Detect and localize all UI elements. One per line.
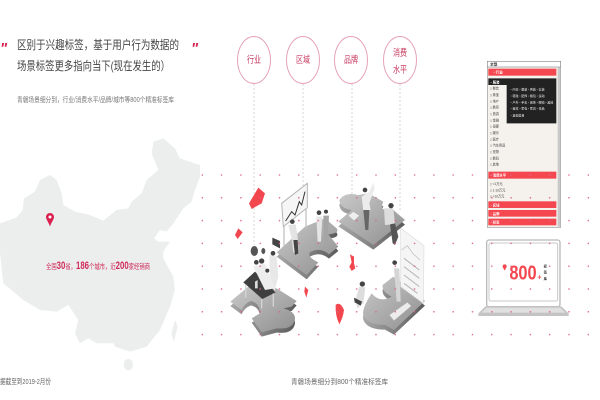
panel dark flyout menu: ▫ 其他类目 bbox=[511, 112, 525, 117]
panel search box: 全部 bbox=[490, 62, 498, 67]
panel dark flyout menu: ▫ 服装 bbox=[491, 79, 500, 84]
panel category list: ▯ 其他 bbox=[490, 162, 500, 167]
panel red header: tags bbox=[488, 219, 556, 225]
people at the table bbox=[269, 255, 278, 292]
category circle: 消费水平 bbox=[384, 36, 416, 84]
panel category list: ▯ 医疗 bbox=[490, 136, 500, 141]
subheading: 青磐场景细分到，行业/消费水平/品牌/城市等800个精准标签库 bbox=[17, 95, 174, 104]
panel dark flyout menu: ▫ 美妆 ▫ 家电 ▫ 家具 ▫ 食品 bbox=[511, 106, 545, 111]
vertical label: 标 bbox=[544, 263, 548, 268]
puzzle piece: bottom right bbox=[354, 228, 425, 335]
opening quote mark: " bbox=[0, 40, 8, 57]
panel category list: ▯ 餐饮 bbox=[490, 86, 500, 91]
panel red header: consumption level: ▫ 消费水平 bbox=[491, 173, 507, 178]
map of China bbox=[0, 138, 200, 370]
panel red header: consumption level bbox=[488, 172, 556, 179]
panel category list: ▯ 旅游 bbox=[490, 111, 500, 116]
panel consumption options: ▯ <1万元 bbox=[490, 182, 503, 186]
footnote: data date: 据截至到2019-2月份 bbox=[0, 376, 51, 386]
map pin icon bbox=[46, 213, 54, 226]
bench bbox=[389, 302, 411, 321]
filter panel mock-up bbox=[487, 61, 561, 227]
panel consumption options: ▯ 1-10万元 bbox=[490, 188, 506, 192]
panel category list bbox=[490, 86, 505, 167]
vertical label: 库 bbox=[544, 276, 548, 281]
panel red header: region bbox=[488, 201, 556, 208]
category circle: 品牌: 品牌 bbox=[344, 54, 358, 66]
two standing people bbox=[316, 217, 322, 242]
panel red header: industry bbox=[488, 69, 556, 76]
panel category list: ▯ 母婴 bbox=[490, 124, 499, 129]
panel red header: brand bbox=[488, 210, 556, 217]
panel dark flyout menu: ▫ 鞋靴 ▫ 配饰 ▫ 箱包 ▫ 运动 bbox=[511, 93, 545, 98]
vertical label bbox=[544, 263, 548, 281]
panel category list: ▯ 地产 bbox=[490, 98, 499, 103]
category circle: 消费水平: 水平 bbox=[393, 64, 407, 76]
panel category list: ▯ 教育 bbox=[490, 105, 499, 110]
panel scrollbar bbox=[558, 67, 560, 227]
tablet on piece bbox=[348, 212, 359, 221]
table with laptop bbox=[243, 272, 276, 299]
panel search box bbox=[487, 61, 561, 67]
dashed connector lines bbox=[254, 84, 400, 245]
puzzle illustration: left half bbox=[230, 183, 338, 337]
vertical label: 签 bbox=[544, 270, 548, 275]
category circle: 品牌 bbox=[334, 36, 368, 84]
panel dark flyout menu: ▫ 户外 ▫ 手表 ▫ 首饰 ▫ 眼镜 ▫ 其他 bbox=[511, 99, 553, 104]
category circle: 行业 bbox=[238, 36, 270, 84]
laptop with 800+ labels bbox=[478, 240, 569, 316]
category circle: 行业: 行业 bbox=[247, 54, 261, 66]
report sheet bbox=[401, 228, 424, 303]
small sign bbox=[272, 238, 280, 248]
laptop body bbox=[478, 240, 569, 316]
panel consumption options: ▯ >10万元 bbox=[490, 195, 505, 199]
map statistics text: 全国30省，186个城市，近200家经销商 bbox=[46, 260, 150, 272]
plus sign: + bbox=[537, 273, 542, 282]
closing quote mark: " bbox=[191, 40, 199, 57]
seated person bbox=[355, 287, 365, 308]
panel category list: ▯ 宠物 bbox=[490, 149, 499, 154]
category circle: 消费水平: 消费 bbox=[393, 47, 407, 59]
panel red header: region: ▫ 区域 bbox=[491, 202, 500, 207]
panel red header: brand: ▫ 品牌 bbox=[491, 211, 500, 216]
panel category list: ▯ 金融 bbox=[490, 117, 500, 122]
panel dark flyout menu bbox=[488, 78, 556, 123]
puzzle illustration: right half bbox=[336, 182, 425, 335]
puzzle piece: top right bbox=[338, 182, 405, 250]
headline bbox=[17, 37, 179, 73]
red floating shapes bbox=[235, 188, 308, 298]
panel consumption options bbox=[490, 182, 506, 199]
puzzle piece: bottom left bbox=[230, 246, 297, 337]
panel red header: tags: ▫ 标签 bbox=[491, 220, 500, 225]
puzzle piece: upper middle bbox=[272, 183, 338, 279]
panel category list: ▯ 珠宝 bbox=[490, 92, 499, 97]
caption: puzzle illustration: 青磐场景细分到800个精准标签库 bbox=[291, 377, 388, 386]
panel category list: ▯ 汽车用品 bbox=[490, 143, 505, 148]
red floating shapes bbox=[336, 254, 355, 324]
person sitting on edge bbox=[384, 208, 395, 225]
headline: 区别于兴趣标签，基于用户行为数据的 bbox=[17, 37, 179, 52]
800 figure: 800 bbox=[509, 261, 537, 284]
laptop pin icon bbox=[503, 264, 507, 271]
person waving bbox=[362, 182, 375, 211]
headline: 场景标签更多指向当下(现在发生的） bbox=[17, 58, 170, 73]
category circle: 区域 bbox=[286, 36, 320, 84]
speech bubbles bbox=[251, 246, 258, 256]
panel dark flyout menu: ▫ 内衣 ▫ 童装 ▫ 男装 ▫ 女装 bbox=[511, 87, 545, 92]
panel red header: industry: ▫ 行业 bbox=[493, 70, 503, 75]
standing person bbox=[394, 268, 401, 302]
presentation board bbox=[282, 183, 307, 227]
panel category list: ▯ 数码 bbox=[490, 155, 499, 160]
category circle: 区域: 区域 bbox=[296, 54, 310, 66]
presenter bbox=[288, 224, 298, 252]
panel category list: ▯ 娱乐 bbox=[490, 130, 500, 135]
